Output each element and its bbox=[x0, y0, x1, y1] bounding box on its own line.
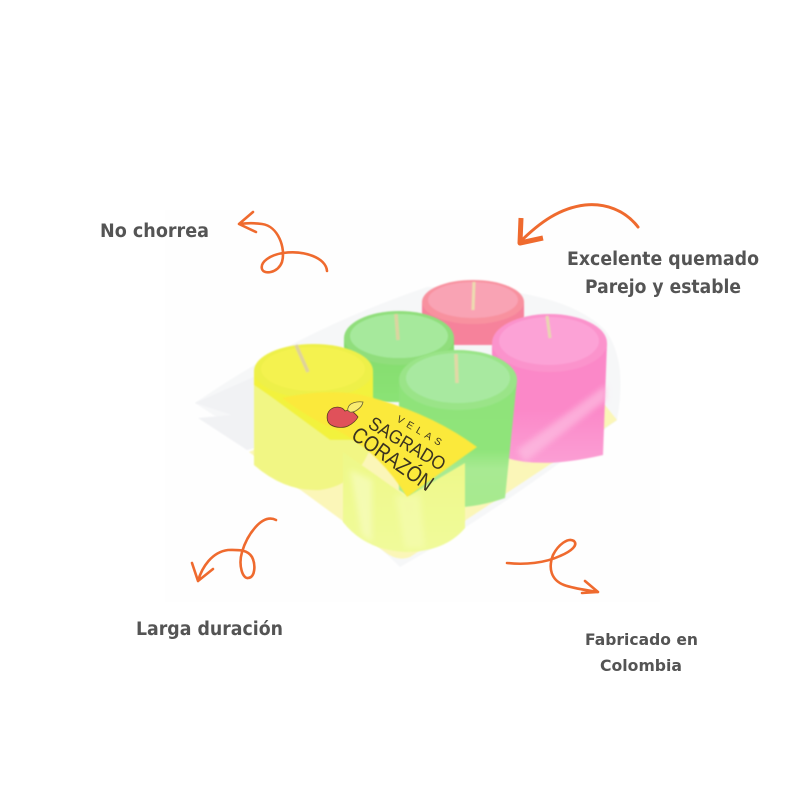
heading: fabricado en colombia: Colombia bbox=[600, 656, 682, 675]
candle: back pink bbox=[422, 280, 524, 345]
plastic bag bbox=[195, 287, 621, 567]
heading: larga duracion: Larga duración bbox=[136, 619, 283, 640]
arrow: excelente quemado bbox=[520, 205, 638, 243]
icon: flame bbox=[348, 402, 363, 412]
candle: back green bbox=[344, 311, 454, 402]
candle: right pink bbox=[492, 314, 607, 463]
icon: heart bbox=[327, 407, 358, 427]
tag shape bbox=[282, 392, 477, 497]
heading: fabricado en colombia: Fabricado en bbox=[585, 630, 698, 649]
label text: corazon: CORAZÓN bbox=[347, 422, 438, 496]
heading: no chorrea: No chorrea bbox=[100, 221, 209, 242]
product photo: candle pack bbox=[195, 280, 621, 567]
heading: excelente quemado: Excelente quemado bbox=[567, 249, 759, 270]
candle: front green bbox=[399, 350, 517, 507]
candle: yellow bbox=[254, 344, 373, 490]
plastic sheen over pink candle bbox=[517, 385, 606, 462]
arrow: larga duracion bbox=[192, 519, 276, 581]
photo backdrop bbox=[165, 210, 660, 602]
candle: front pale yellow bbox=[343, 452, 465, 552]
label text: sagrado: SAGRADO bbox=[364, 413, 449, 476]
bag fold left bbox=[195, 376, 256, 450]
yellow card base bbox=[249, 405, 617, 559]
heading: excelente quemado: Parejo y estable bbox=[585, 277, 741, 298]
label text: velas: VELAS bbox=[394, 414, 444, 449]
arrow: fabricado en colombia bbox=[507, 540, 598, 593]
heading: excelente quemado bbox=[567, 249, 759, 298]
arrow: no chorrea bbox=[239, 212, 327, 272]
label tag bbox=[282, 392, 477, 497]
heading: fabricado en colombia bbox=[585, 630, 698, 675]
